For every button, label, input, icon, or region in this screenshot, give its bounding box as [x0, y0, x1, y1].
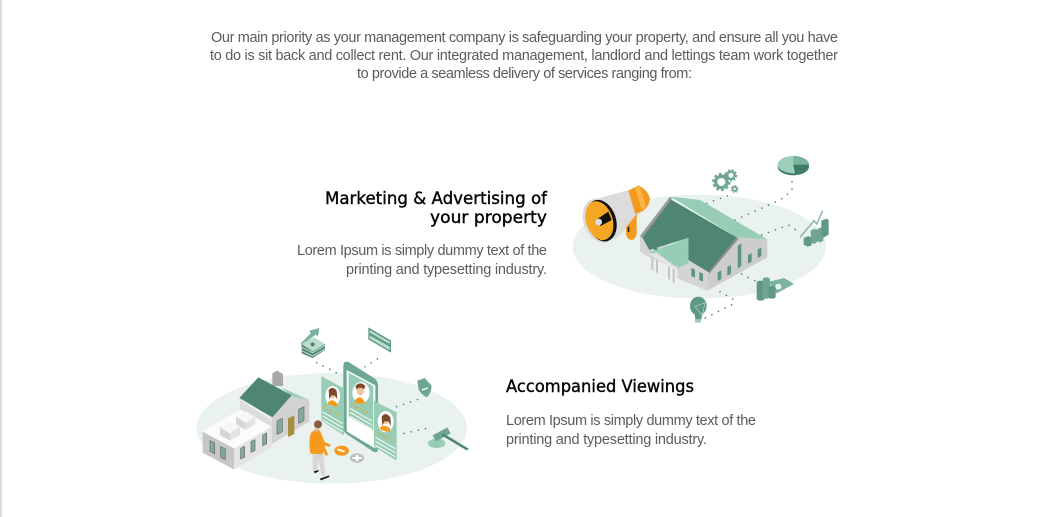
- icon: light bulb: [690, 297, 707, 323]
- icon: grey plus button: [350, 453, 364, 463]
- small house: [203, 371, 309, 469]
- icon: megaphone: [577, 185, 650, 247]
- person: [309, 420, 331, 480]
- ground ellipse: [573, 195, 826, 299]
- text: marketing description: Lorem Ipsum is simply dummy text of the: [297, 243, 547, 259]
- windows: [210, 441, 225, 460]
- chimney: [272, 371, 283, 386]
- intro paragraph: to do is sit back and collect rent. Our integrated management, landlord and lettings team work together: [210, 48, 838, 64]
- left edge strip: [0, 0, 2, 517]
- main walls: [240, 400, 272, 427]
- dotted connectors: [700, 182, 796, 321]
- windows: [691, 243, 761, 282]
- icon: orange minus button: [334, 446, 349, 456]
- icon: shield: [417, 378, 431, 397]
- illustration: marketing house: [573, 156, 829, 323]
- text: marketing description: [297, 243, 547, 278]
- text: viewings description: Lorem Ipsum is simply dummy text of the: [506, 413, 756, 429]
- heading: viewings: Accompanied Viewings: [506, 377, 694, 397]
- heading: marketing: Marketing & Advertising of: [325, 189, 548, 209]
- porch roof: [649, 238, 688, 269]
- house: [640, 197, 767, 291]
- intro paragraph: [210, 30, 838, 82]
- text: viewings description: printing and typesetting industry.: [506, 432, 707, 448]
- icon: credit card: [368, 327, 391, 353]
- illustration: viewings house: [196, 327, 469, 484]
- phone and profile cards: [321, 362, 397, 461]
- icon: gavel: [428, 427, 469, 451]
- extension walls: [234, 427, 272, 469]
- roof: [258, 377, 309, 400]
- heading: marketing: your property: [430, 208, 547, 228]
- ground ellipse: [196, 373, 467, 484]
- icon: money and arrow: [301, 328, 325, 358]
- text: viewings description: [506, 413, 756, 448]
- text: marketing description: printing and typesetting industry.: [346, 262, 547, 278]
- dotted connectors: [317, 358, 432, 433]
- icon: pie chart: [778, 156, 809, 175]
- icon: coins and banknote: [757, 277, 794, 301]
- roof: [671, 197, 767, 239]
- intro paragraph: Our main priority as your management company is safeguarding your property, and ensure all you have: [211, 30, 838, 46]
- door: [288, 415, 294, 437]
- rooftop boxes: [220, 427, 230, 441]
- walls: [640, 236, 707, 291]
- heading: marketing: [325, 189, 548, 228]
- icon: gears: [713, 170, 738, 192]
- icon: growth chart: [800, 211, 829, 247]
- intro paragraph: to provide a seamless delivery of services ranging from:: [357, 66, 692, 82]
- columns: [651, 257, 675, 283]
